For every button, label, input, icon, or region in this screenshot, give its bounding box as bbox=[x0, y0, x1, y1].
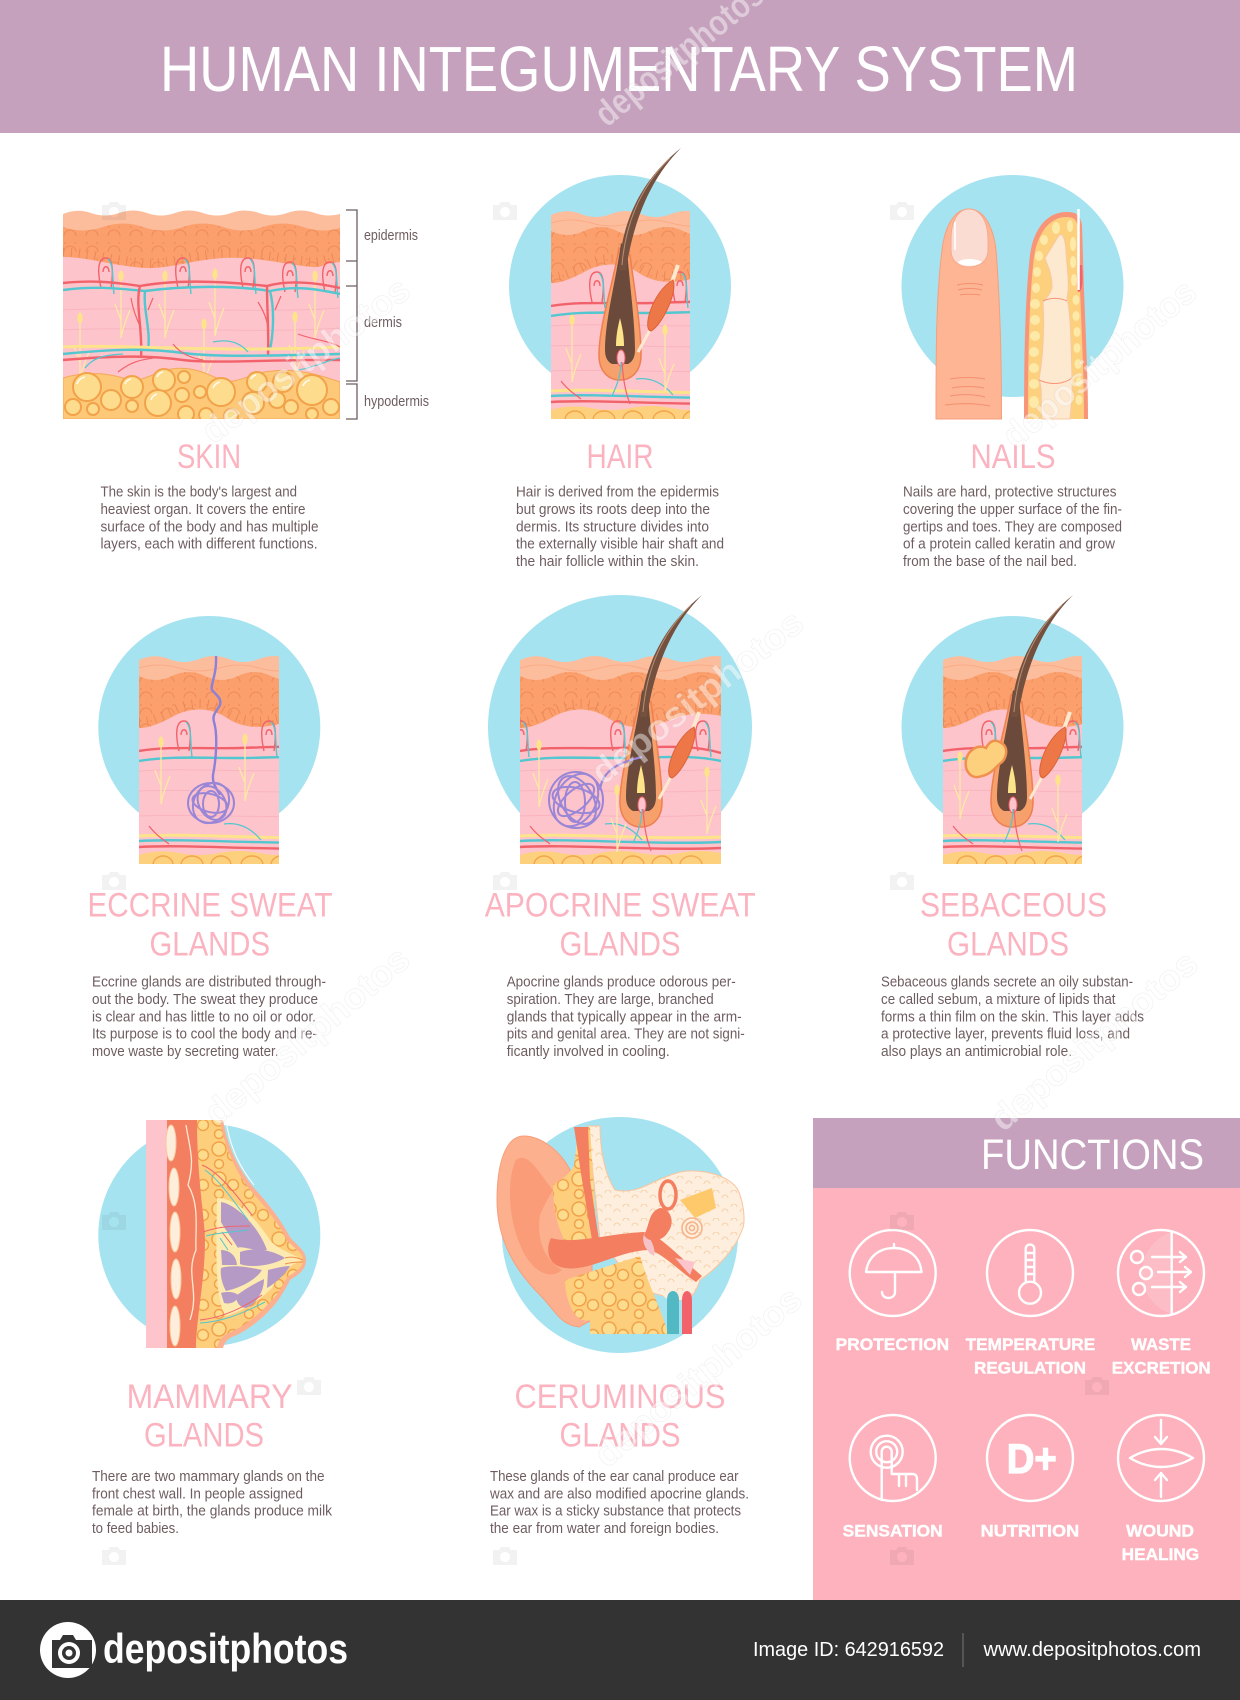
nails description: Nails are hard, protective structures bbox=[903, 485, 1116, 501]
heading: apocrine sweat glands bbox=[485, 887, 756, 964]
ceruminous description: These glands of the ear canal produce ear bbox=[490, 1469, 739, 1485]
icon: protection umbrella bbox=[850, 1230, 936, 1316]
mammary description: female at birth, the glands produce milk bbox=[92, 1504, 333, 1520]
panel: nails bbox=[902, 175, 1124, 570]
hair description: Hair is derived from the epidermis bbox=[516, 485, 719, 501]
icon background circle bbox=[98, 1124, 320, 1346]
skin description: heaviest organ. It covers the entire bbox=[100, 502, 306, 518]
heading: nails: NAILS bbox=[970, 438, 1056, 476]
eccrine description: is clear and has little to no oil or odor. bbox=[92, 1009, 316, 1025]
apocrine gland illustration bbox=[514, 595, 730, 865]
heading: eccrine sweat glands: GLANDS bbox=[150, 926, 270, 964]
label: wound healing: HEALING bbox=[1122, 1545, 1199, 1564]
eccrine description: Eccrine glands are distributed through- bbox=[92, 975, 326, 991]
mammary description: to feed babies. bbox=[92, 1521, 179, 1537]
sebaceous gland illustration bbox=[943, 595, 1082, 864]
label: temperature regulation: REGULATION bbox=[974, 1359, 1086, 1378]
heading: eccrine sweat glands: ECCRINE SWEAT bbox=[88, 887, 332, 925]
watermarks: depositphotos bbox=[982, 942, 1206, 1139]
eccrine gland illustration bbox=[139, 656, 279, 864]
panel: ceruminous glands bbox=[489, 1117, 749, 1537]
apocrine description: pits and genital area. They are not signi- bbox=[507, 1027, 745, 1043]
panel: sebaceous glands bbox=[881, 595, 1153, 1060]
heading: ceruminous glands: CERUMINOUS bbox=[514, 1378, 726, 1416]
heading: ceruminous glands bbox=[514, 1378, 726, 1455]
sebaceous description: forms a thin film on the skin. This layer adds bbox=[881, 1009, 1144, 1025]
nails description bbox=[903, 485, 1122, 570]
panel: eccrine sweat glands bbox=[88, 616, 349, 1060]
image id: Image ID: 642916592 bbox=[753, 1639, 944, 1661]
icon background circle bbox=[902, 175, 1124, 397]
ceruminous description: the ear from water and foreign bodies. bbox=[490, 1521, 719, 1537]
heading: mammary glands: MAMMARY bbox=[127, 1378, 293, 1416]
sebaceous description bbox=[881, 975, 1144, 1060]
icon background circle bbox=[509, 175, 731, 397]
label: temperature regulation: TEMPERATURE bbox=[966, 1335, 1095, 1354]
watermarks bbox=[193, 0, 1206, 1475]
ceruminous description: Ear wax is a sticky substance that protects bbox=[490, 1504, 741, 1520]
hair description bbox=[516, 485, 724, 570]
eccrine description: out the body. The sweat they produce bbox=[92, 992, 318, 1008]
watermarks: depositphotos bbox=[994, 270, 1204, 456]
panel: mammary glands bbox=[92, 1120, 333, 1537]
title: HUMAN INTEGUMENTARY SYSTEM bbox=[160, 33, 1078, 105]
mammary description: There are two mammary glands on the bbox=[92, 1469, 324, 1485]
skin description: surface of the body and has multiple bbox=[100, 519, 318, 535]
label: hypodermis: hypodermis bbox=[364, 394, 429, 410]
skin description: The skin is the body's largest and bbox=[100, 485, 297, 501]
icon: nutrition D+ bbox=[987, 1415, 1073, 1501]
panel: functions bbox=[813, 1118, 1240, 1600]
sebaceous description: Sebaceous glands secrete an oily substan- bbox=[881, 975, 1133, 991]
heading: eccrine sweat glands bbox=[88, 887, 332, 964]
skin description: layers, each with different functions. bbox=[100, 537, 318, 553]
sebaceous description: a protective layer, prevents fluid loss, and bbox=[881, 1027, 1130, 1043]
hair description: the hair follicle within the skin. bbox=[516, 554, 699, 570]
footer bar bbox=[0, 1600, 1240, 1700]
apocrine description: Apocrine glands produce odorous per- bbox=[507, 975, 736, 991]
finger exterior bbox=[936, 209, 1002, 419]
label: protection: PROTECTION bbox=[836, 1335, 949, 1354]
functions header bbox=[813, 1118, 1240, 1188]
hair description: dermis. Its structure divides into bbox=[516, 519, 709, 535]
website: www.depositphotos.com bbox=[982, 1639, 1201, 1661]
eccrine description bbox=[92, 975, 326, 1060]
heading: ceruminous glands: GLANDS bbox=[560, 1417, 680, 1455]
sebaceous description: also plays an antimicrobial role. bbox=[881, 1044, 1072, 1060]
footer logo: depositphotos bbox=[103, 1625, 348, 1672]
heading: hair: HAIR bbox=[586, 438, 654, 476]
icon background circle bbox=[902, 616, 1124, 838]
mammary description bbox=[92, 1469, 333, 1537]
mammary description: front chest wall. In people assigned bbox=[92, 1486, 303, 1502]
nails description: gertips and toes. They are composed bbox=[903, 519, 1122, 535]
nails description: from the base of the nail bed. bbox=[903, 554, 1077, 570]
footer logo bbox=[40, 1622, 348, 1678]
heading: sebaceous glands: SEBACEOUS bbox=[920, 887, 1107, 925]
sebaceous description: ce called sebum, a mixture of lipids that bbox=[881, 992, 1116, 1008]
icon background circle bbox=[488, 595, 752, 859]
watermarks: depositphotos bbox=[583, 601, 811, 792]
heading: sebaceous glands: GLANDS bbox=[947, 926, 1069, 964]
skin cross-section illustration bbox=[63, 210, 343, 423]
icon: nutrition D+: D+ bbox=[1007, 1435, 1057, 1482]
label: waste excretion bbox=[1112, 1335, 1211, 1378]
apocrine description: glands that typically appear in the arm- bbox=[507, 1009, 742, 1025]
ceruminous description: wax and are also modified apocrine glands. bbox=[489, 1486, 749, 1502]
skin description bbox=[100, 485, 318, 553]
icon background circle bbox=[502, 1117, 738, 1353]
watermarks: depositphotos bbox=[196, 938, 417, 1133]
ceruminous description bbox=[489, 1469, 749, 1537]
label: wound healing: WOUND bbox=[1126, 1522, 1194, 1541]
watermarks: depositphotos bbox=[193, 268, 417, 451]
watermarks: depositphotos bbox=[586, 1278, 810, 1475]
label: nutrition: NUTRITION bbox=[981, 1522, 1079, 1541]
hair illustration bbox=[551, 148, 690, 419]
apocrine description: ficantly involved in cooling. bbox=[507, 1044, 670, 1060]
label: sensation: SENSATION bbox=[843, 1522, 943, 1541]
nails description: of a protein called keratin and grow bbox=[903, 537, 1115, 553]
eccrine description: move waste by secreting water. bbox=[92, 1044, 278, 1060]
label: epidermis: epidermis bbox=[364, 228, 418, 244]
heading: sebaceous glands bbox=[920, 887, 1107, 964]
label: dermis: dermis bbox=[364, 315, 402, 331]
apocrine description bbox=[507, 975, 745, 1060]
nails description: covering the upper surface of the fin- bbox=[903, 502, 1122, 518]
finger cross-section bbox=[1024, 209, 1088, 419]
hair description: the externally visible hair shaft and bbox=[516, 537, 724, 553]
icon: sensation finger bbox=[850, 1415, 936, 1501]
heading: apocrine sweat glands: APOCRINE SWEAT bbox=[485, 887, 756, 925]
layer brackets bbox=[346, 210, 357, 419]
heading: skin: SKIN bbox=[177, 438, 241, 476]
ear cross-section illustration bbox=[497, 1126, 744, 1334]
heading: mammary glands: GLANDS bbox=[144, 1417, 264, 1455]
panel: skin bbox=[63, 210, 429, 553]
icon background circle bbox=[98, 616, 320, 838]
panel: apocrine sweat glands bbox=[485, 595, 756, 1060]
label: waste excretion: EXCRETION bbox=[1112, 1359, 1211, 1378]
heading: mammary glands bbox=[127, 1378, 293, 1455]
label: temperature regulation bbox=[966, 1335, 1095, 1378]
panel: hair bbox=[509, 148, 731, 566]
icon: waste excretion bbox=[1118, 1230, 1204, 1316]
functions header: FUNCTIONS bbox=[981, 1131, 1204, 1179]
heading: apocrine sweat glands: GLANDS bbox=[560, 926, 680, 964]
breast cross-section illustration bbox=[146, 1120, 306, 1348]
apocrine description: spiration. They are large, branched bbox=[507, 992, 714, 1008]
eccrine description: Its purpose is to cool the body and re- bbox=[92, 1027, 317, 1043]
label: waste excretion: WASTE bbox=[1131, 1335, 1191, 1354]
icon: thermometer bbox=[987, 1230, 1073, 1316]
hair description: but grows its roots deep into the bbox=[516, 502, 710, 518]
label: wound healing bbox=[1122, 1522, 1199, 1564]
header banner bbox=[0, 0, 1240, 133]
icon: wound healing bbox=[1118, 1415, 1204, 1501]
